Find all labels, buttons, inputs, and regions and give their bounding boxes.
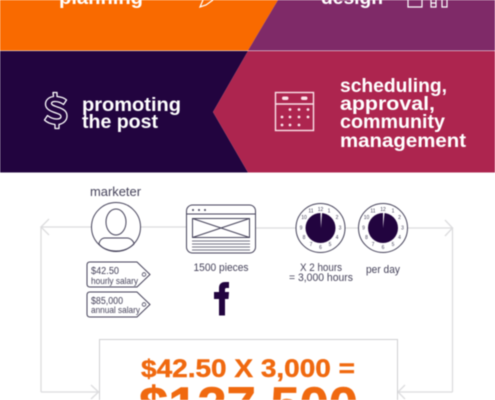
icon: layout tools (408, 0, 447, 7)
icon: pencil tip (200, 0, 213, 7)
icon: calendar (275, 92, 314, 130)
tag: hourly salary: $42.50 (91, 266, 119, 277)
label: times two hours: X 2 hours (300, 262, 342, 274)
panel: design (248, 0, 495, 50)
icon: clock one: 1 (328, 208, 331, 214)
icon: clock two: 8 (365, 235, 368, 241)
heading: promoting the post: the post (82, 112, 159, 133)
icon: clock two: 9 (362, 226, 365, 232)
label: 1500 pieces: 1500 pieces (194, 262, 249, 274)
icon: clock two: 3 (401, 226, 404, 232)
label: per day: per day (366, 264, 400, 276)
icon: clock two: 12 (380, 207, 386, 213)
heading: scheduling, approval, community management (340, 76, 467, 152)
icon: facebook f (214, 282, 229, 316)
icon: clock two: 6 (382, 245, 385, 251)
icon: clock two: 5 (392, 242, 395, 248)
icon: clock one: 9 (300, 226, 303, 232)
icon: clock one: 10 (301, 215, 307, 221)
label: times two hours (289, 262, 353, 284)
icon: clock one: 12 (318, 207, 323, 213)
icon: clock one (296, 204, 345, 252)
icon: clock one: 11 (308, 208, 314, 214)
tag: hourly salary (87, 262, 150, 287)
heading: scheduling, approval, community management: community (340, 112, 445, 133)
tag: annual salary: annual salary (91, 305, 140, 315)
heading: promoting the post: promoting (82, 95, 181, 116)
heading: promoting the post (82, 95, 181, 133)
icon: clock two: 11 (370, 208, 376, 214)
panel: promoting the post (0, 51, 248, 172)
icon: clock one: 4 (336, 235, 339, 241)
panel: scheduling, approval, community management (213, 51, 495, 172)
label: marketer: marketer (90, 184, 142, 199)
icon: clock one: 2 (336, 215, 339, 221)
label: times two hours: = 3,000 hours (289, 272, 353, 284)
flow arrows around the calculation (41, 219, 452, 399)
icon: web post window (186, 205, 256, 253)
icon: clock one: 6 (319, 245, 322, 251)
tag: hourly salary: hourly salary (91, 276, 138, 286)
heading: scheduling, approval, community management: scheduling, (340, 76, 447, 97)
icon: clock two: 4 (398, 235, 401, 241)
panel: planning (0, 0, 278, 50)
icon: clock two (358, 204, 408, 252)
panel: total cost calculation (100, 340, 398, 400)
tag: annual salary: $85,000 (91, 296, 123, 307)
icon: dollar sign (44, 92, 67, 128)
equation: $42.50 X 3,000 = (141, 355, 355, 383)
heading: scheduling, approval, community management: approval, (340, 94, 435, 115)
icon: clock two: 2 (398, 215, 401, 221)
icon: marketer avatar (92, 202, 140, 252)
icon: clock one: 7 (310, 242, 313, 248)
icon: clock two: 7 (372, 242, 375, 248)
icon: clock one: 3 (339, 226, 342, 232)
icon: clock two: 10 (364, 215, 369, 221)
heading: scheduling, approval, community management: management (340, 131, 467, 152)
icon: clock two: 1 (392, 208, 395, 214)
icon: clock one: 8 (303, 235, 306, 241)
icon: clock one: 5 (329, 242, 332, 248)
tag: annual salary (87, 292, 150, 317)
